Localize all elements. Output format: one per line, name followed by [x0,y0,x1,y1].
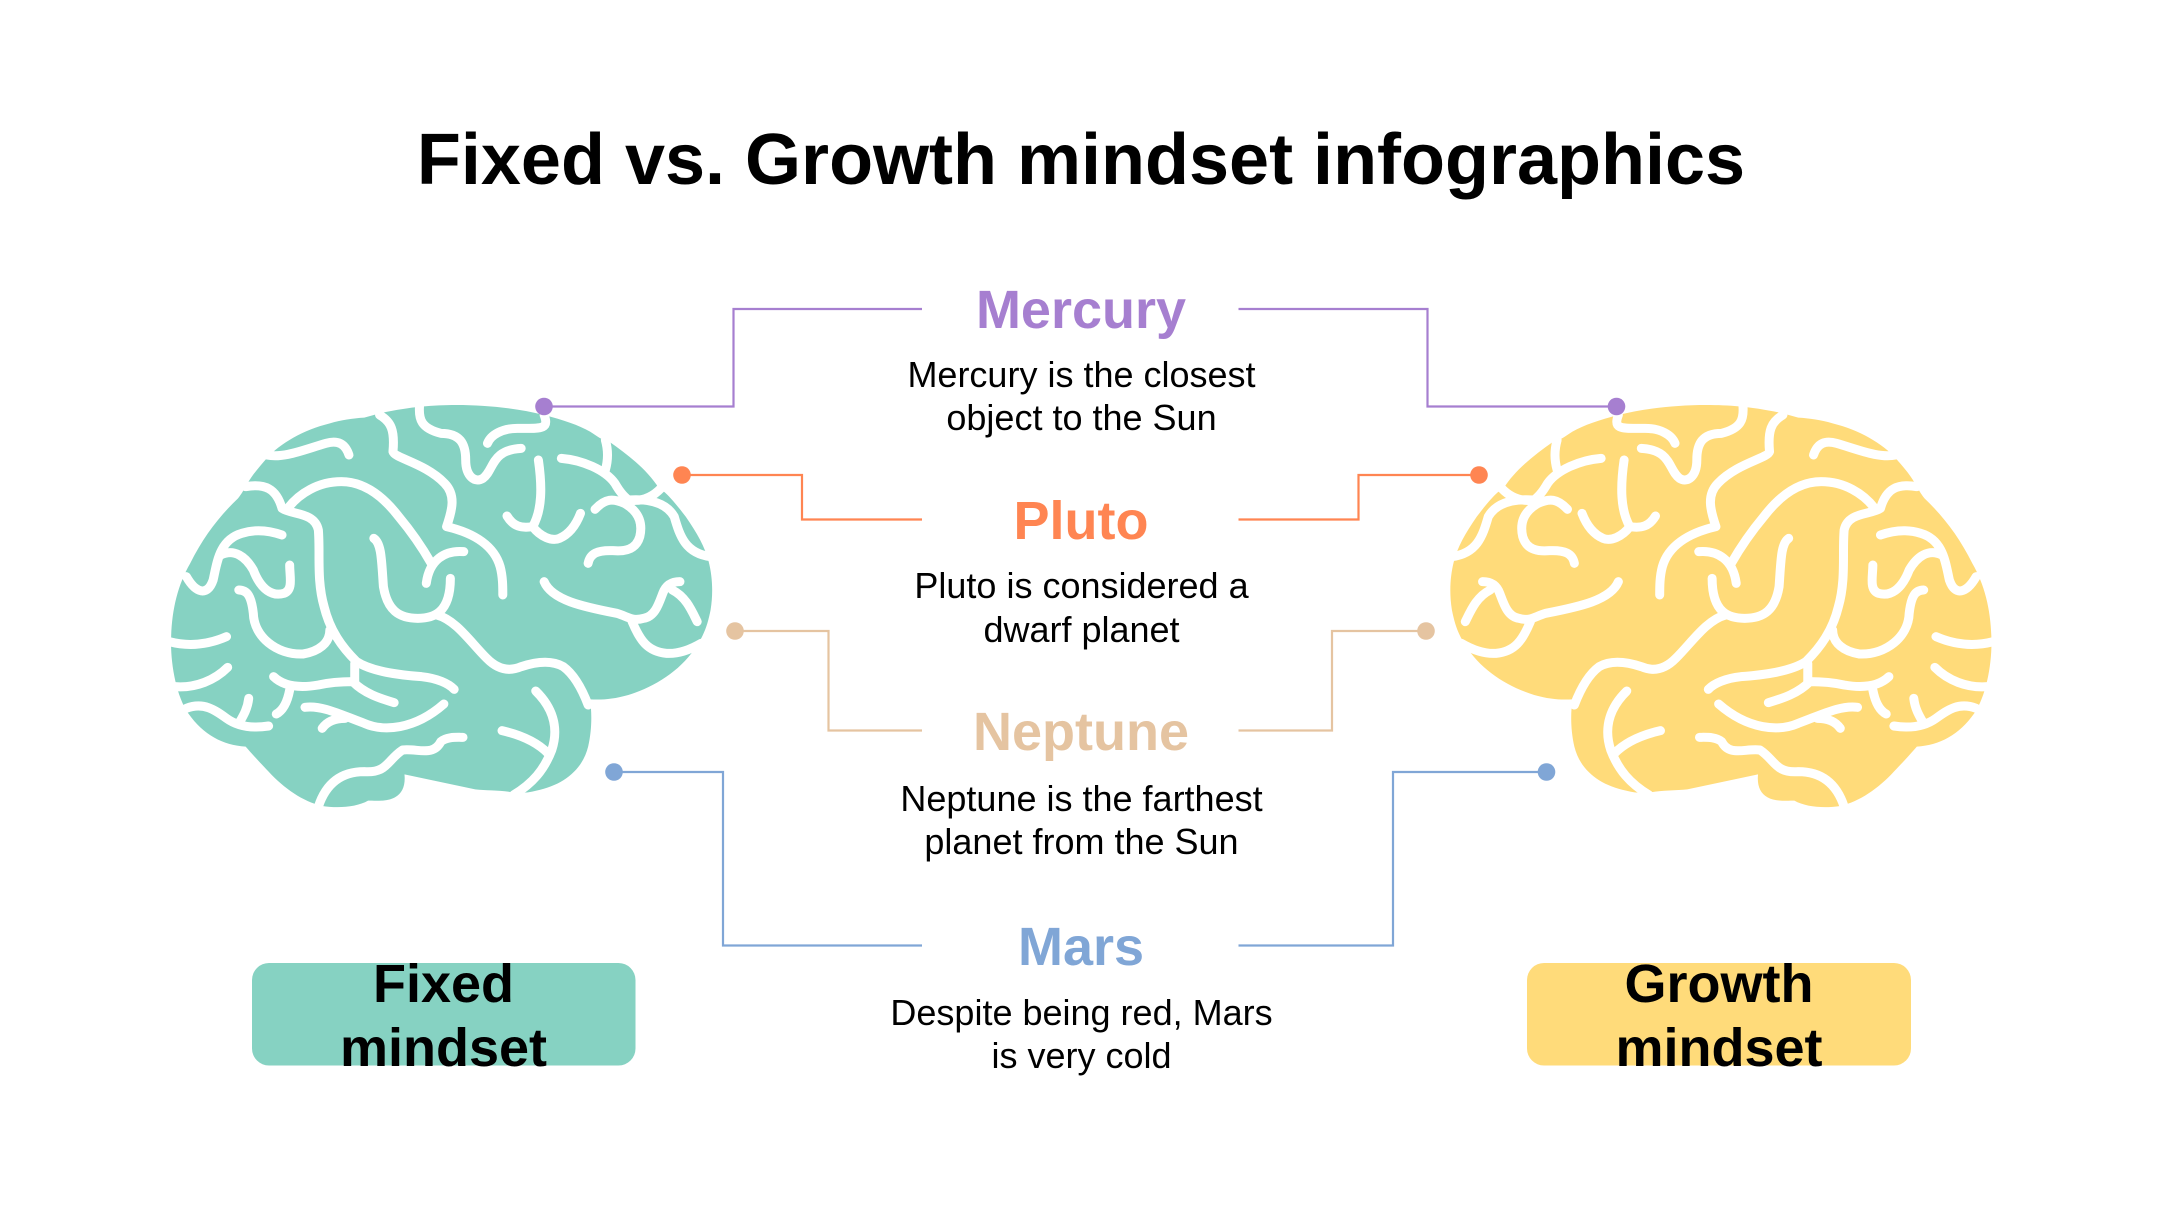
label: growth mindset: Growth [1625,954,1813,1014]
connector: mercury right [1238,309,1625,415]
brain: fixed mindset [169,403,712,807]
heading: mercury: Mercury [976,280,1186,340]
description: pluto: dwarf planet [983,609,1180,650]
heading: pluto: Pluto [1014,491,1148,551]
heading: neptune: Neptune [973,702,1189,762]
label: fixed mindset: Fixed [373,954,514,1014]
connector: mars left [605,763,922,946]
label: growth mindset [1527,954,1911,1078]
label: fixed mindset: mindset [340,1018,547,1078]
connector: pluto right [1238,466,1488,520]
connector: neptune right [1238,622,1435,730]
description: mercury: Mercury is the closest [907,354,1256,395]
brain: growth mindset [1450,403,1993,807]
heading: mars: Mars [1018,917,1144,977]
connector: mercury left [535,309,922,415]
description: neptune: Neptune is the farthest [900,778,1263,819]
label: growth mindset: mindset [1615,1018,1823,1078]
connector: neptune left [726,622,922,730]
description: neptune: planet from the Sun [924,821,1239,862]
connector: mars right [1238,763,1555,946]
text block: pluto [914,491,1250,650]
text block: mars [890,917,1273,1076]
connector: pluto left [673,466,922,520]
description: mars: is very cold [991,1035,1172,1076]
description: mars: Despite being red, Mars [890,992,1273,1033]
description: mercury: object to the Sun [946,397,1217,438]
title: Fixed vs. Growth mindset infographics [417,120,1745,200]
text block: mercury [907,280,1256,438]
label: fixed mindset [252,954,636,1078]
description: pluto: Pluto is considered a [914,565,1250,606]
text block: neptune [900,702,1263,862]
